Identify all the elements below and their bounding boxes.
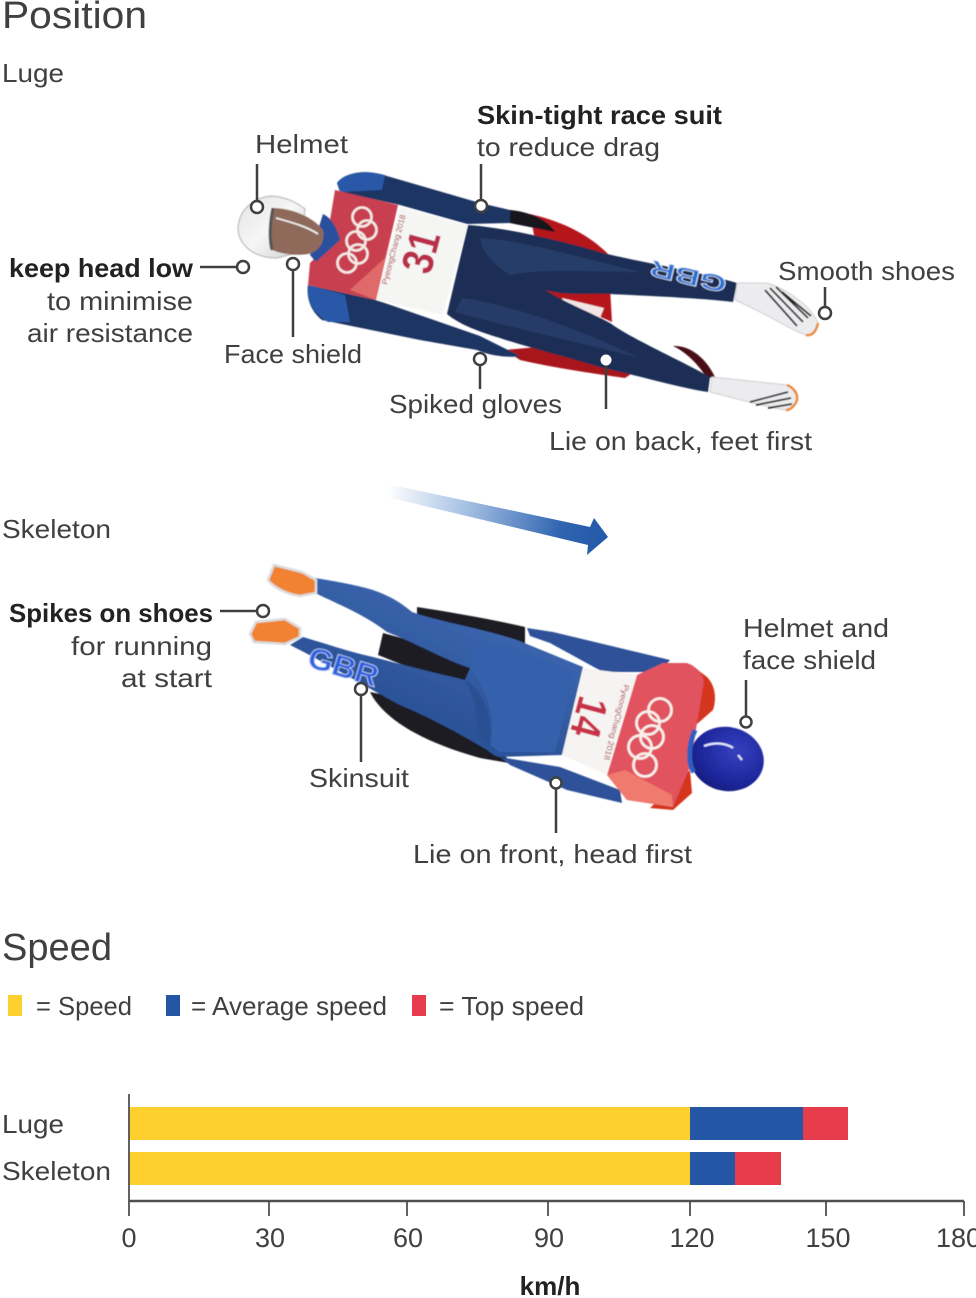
helmet and visor xyxy=(684,720,770,798)
olympic rings xyxy=(338,208,376,272)
axis tick labels: 90 xyxy=(534,1223,564,1253)
label: Helmet xyxy=(251,129,349,213)
legend item: average speed: = Average speed xyxy=(191,991,387,1021)
axes xyxy=(129,1094,964,1216)
subheading: Luge: Luge xyxy=(2,58,64,88)
label: lie on front, head first: Lie on front, head first xyxy=(413,839,693,869)
illustration: skeleton athlete: PyeongChang 2018 xyxy=(602,683,631,762)
bar: Skeleton: Skeleton xyxy=(2,1156,111,1186)
label: face shield xyxy=(224,258,362,369)
illustration: luge athlete: PyeongChang 2018 xyxy=(380,213,408,286)
label: smooth shoes: Smooth shoes xyxy=(778,256,955,286)
top arm xyxy=(527,628,670,672)
label: skin-tight race suit: Skin-tight race suit xyxy=(477,100,722,130)
label: spiked gloves xyxy=(389,353,562,419)
subheading: Skeleton: Skeleton xyxy=(2,514,111,544)
olympic rings xyxy=(628,698,672,776)
label: skin-tight race suit: to reduce drag xyxy=(477,132,660,162)
athlete legs and body xyxy=(290,578,583,757)
legend item: top speed: = Top speed xyxy=(439,991,584,1021)
label: Helmet: Helmet xyxy=(255,129,349,159)
label: skinsuit xyxy=(309,683,410,793)
label: skin-tight race suit xyxy=(475,100,722,212)
axis tick labels: 150 xyxy=(805,1223,851,1253)
helmet xyxy=(238,196,305,258)
bottom arm xyxy=(500,757,622,803)
axis tick labels: 60 xyxy=(393,1223,423,1253)
shoes xyxy=(735,283,818,335)
label: skinsuit: Skinsuit xyxy=(309,763,410,793)
axis tick labels: 120 xyxy=(669,1223,715,1253)
face xyxy=(269,208,324,255)
skeleton sled xyxy=(370,607,525,764)
label: lie on back, feet first: Lie on back, feet first xyxy=(549,426,813,456)
label: keep head low xyxy=(9,253,249,348)
label: keep head low: air resistance xyxy=(27,318,193,348)
orange shoes xyxy=(268,565,316,596)
GBR leg lettering: GBR xyxy=(647,255,729,298)
athlete legs xyxy=(447,225,737,392)
label: spikes on shoes: Spikes on shoes xyxy=(9,598,213,628)
bar: Skeleton xyxy=(2,1152,781,1186)
arrow: sliding direction xyxy=(387,484,608,555)
label: face shield: Face shield xyxy=(224,339,362,369)
collar xyxy=(310,214,340,262)
bib number 31: 31 xyxy=(392,225,451,279)
label: spikes on shoes: at start xyxy=(121,663,213,693)
bib xyxy=(562,668,637,775)
label: helmet and face shield: face shield xyxy=(743,645,876,675)
axis tick labels: 0 xyxy=(121,1223,137,1253)
red sled edge xyxy=(650,664,715,810)
stacked bar chart xyxy=(2,1094,976,1298)
race bib torso xyxy=(308,190,398,300)
label: keep head low: to minimise xyxy=(47,286,193,316)
bottom arm xyxy=(308,285,520,357)
label: smooth shoes xyxy=(778,256,955,319)
GBR leg lettering: GBR xyxy=(304,641,383,694)
bar: Luge: Luge xyxy=(2,1109,64,1139)
label: spiked gloves: Spiked gloves xyxy=(389,389,562,419)
label: spikes on shoes: for running xyxy=(71,631,212,661)
heading: Speed: Speed xyxy=(2,927,112,969)
bib number 14: 14 xyxy=(560,691,617,743)
axis tick labels xyxy=(121,1223,976,1253)
label: helmet and face shield: Helmet and xyxy=(743,613,889,643)
label: spikes on shoes xyxy=(9,598,269,693)
legend xyxy=(8,991,584,1021)
torso xyxy=(607,663,704,807)
bar: Luge xyxy=(2,1107,848,1140)
axis tick labels: 30 xyxy=(255,1223,285,1253)
label: keep head low: keep head low xyxy=(9,253,194,283)
label: lie on back, feet first xyxy=(549,354,813,456)
luge sled xyxy=(505,214,715,378)
label: lie on front, head first xyxy=(413,778,693,869)
label: helmet and face shield xyxy=(740,613,889,728)
legend item: speed: = Speed xyxy=(36,991,132,1021)
illustration: skeleton athlete xyxy=(250,565,770,810)
top arm xyxy=(337,172,555,232)
illustration: luge athlete xyxy=(238,172,818,410)
